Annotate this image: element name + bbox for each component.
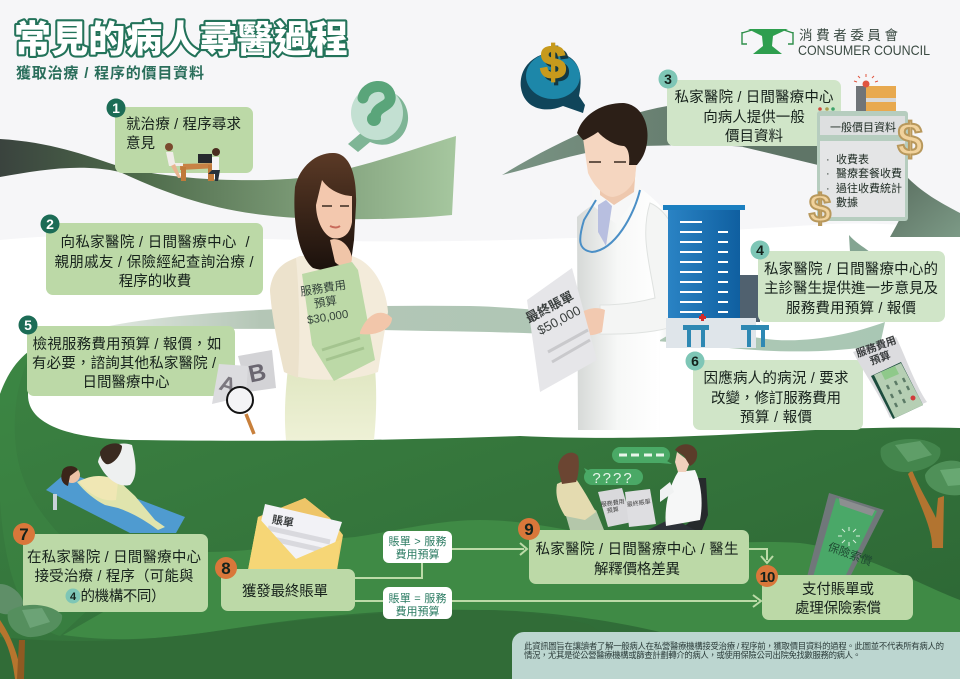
step 2 box: 向私家醫院 / 日間醫療中心 / [60,234,250,251]
paper: final bill [625,489,656,527]
step 4 box [750,240,945,322]
icon: dollar signs: $ [897,113,923,165]
condition tag: bill equals budget: 賬單 = 服務 [388,591,446,605]
patient figure [556,453,604,530]
final bill text [523,288,584,340]
speech bubble: question marks: ???? [592,470,634,487]
doctor illustration [523,103,694,430]
general price information window: 過往收費統計 [836,181,902,195]
step 7 box [13,523,208,612]
step 3 box: 價目資料 [725,128,783,145]
step 6 box: 因應病人的病況 / 要求 [704,369,849,387]
number 8: 8 [221,559,231,578]
number 6: 6 [691,353,699,369]
icon: budget paper and calculator: 預算 [868,348,893,368]
icon: A B comparison and magnifier [212,350,276,434]
number 2 [40,214,60,234]
icon: consultation at desk [165,143,220,181]
step 5 box: 檢視服務費用預算 / 報價，如 [32,336,222,353]
icon: dollar signs: $ [809,187,831,231]
icon: bill in envelope: 賬單 [271,513,295,530]
hospital illustration [663,205,769,348]
step 7 box: 的機構不同） [80,588,166,605]
condition tag: bill equals budget [383,587,452,619]
number 1: 1 [112,100,120,116]
step 6 box: 改變，修訂服務費用 [711,390,841,407]
budget paper text [299,278,351,327]
icon: phone with insurance claim: 保險索償 [826,540,874,569]
number 10: 10 [760,569,775,586]
condition tag: bill greater than budget: 賬單 > 服務 [388,534,446,548]
number 5: 5 [24,317,32,333]
general price information window [809,107,923,231]
step 6 box [686,352,863,430]
step 5 box [18,316,235,396]
inline number 4 [66,588,80,604]
step 10 box: 支付賬單或 [802,581,874,598]
step 10 box: 處理保險索償 [795,600,882,617]
budget paper text: 服務費用 [299,278,347,299]
paper: budget: 服務費用 [600,497,625,509]
final bill text: 最終賬單 [523,288,576,326]
step 4 box: 私家醫院 / 日間醫療中心的 [764,261,938,278]
step 10 box [756,565,913,620]
icon: phone with insurance claim [807,493,884,577]
number 3: 3 [664,71,672,87]
disclaimer panel: 此資訊圖旨在讓讀者了解一般病人在私營醫療機構接受治療 / 程序前，獲取價目資料的過程。此圖並不代表所有病人的 [524,641,944,651]
number 1 [106,98,126,118]
condition tag: bill greater than budget [383,531,452,563]
step 4 box: 服務費用預算 / 報價 [786,300,916,317]
paper: final bill: 最終賬單 [626,497,651,509]
disclaimer panel [512,632,960,679]
subtitle: 獲取治療 / 程序的價目資料 [16,64,204,82]
icon: dollar bubble [521,36,585,113]
number 4: 4 [756,242,764,258]
general price information window: · [826,183,830,195]
icon: doctor explaining to patient [556,444,708,530]
icon: budget paper and calculator: 服務費用 [854,334,898,360]
general price information window: · [826,168,830,180]
arrows between steps 8, 9 and 10 [355,543,773,607]
general price information window: 收費表 [836,152,869,166]
icon: patient on treatment table with doctor [46,443,185,533]
budget paper text: $30,000 [306,309,349,327]
condition tag: bill equals budget: 費用預算 [396,604,440,618]
icon: budget paper and calculator [853,334,927,419]
step 7 box: 在私家醫院 / 日間醫療中心 [27,549,201,566]
icon: question bubble [348,86,408,152]
step 9 box [518,518,749,584]
logo: Consumer Council: 消費者委員會 [799,28,902,43]
title: 常見的病人尋醫過程 [14,19,348,60]
woman illustration [270,153,392,440]
paper: budget: 預算 [606,505,619,515]
step 6 box: 預算 / 報價 [740,409,812,426]
step 7 box: 接受治療 / 程序（可能與 [34,568,194,585]
speech bubble: dashes [612,447,672,464]
step 1 box: 就治療 / 程序尋求 [126,116,242,133]
number 5 [18,316,38,334]
step 3 box: 向病人提供一般 [703,109,805,126]
number 9 [518,518,540,540]
number 7 [13,523,35,545]
logo: Consumer Council: CONSUMER COUNCIL [798,42,930,58]
step 2 box: 親朋戚友 / 保險經紀查詢治療 / [54,254,254,271]
icon: A B comparison and magnifier: A [216,370,239,399]
icon: dollar bubble: $ [543,39,569,91]
title: 常見的病人尋醫過程 [14,19,348,60]
step 4 box: 主診醫生提供進一步意見及 [764,279,938,297]
step 1 box: 意見 [126,134,155,152]
number 6 [686,352,704,370]
step 8 box [215,557,355,611]
icon: dollar signs [809,113,923,231]
icon: A B comparison and magnifier: B [246,358,269,388]
speech bubble: question marks [584,468,643,487]
general price information window: · [826,154,830,166]
number 4 [750,240,770,260]
doctor figure [648,444,708,530]
budget paper text: 預算 [313,293,338,311]
number 2: 2 [46,216,54,232]
tree: bottom left [0,584,62,679]
number 3 [658,70,678,88]
icon: dollar bubble: $ [540,36,566,88]
number 7: 7 [19,525,29,544]
step 5 box: 有必要，諮詢其他私家醫院 / [32,355,217,372]
final bill text: $50,000 [535,303,583,338]
step 2 box [40,214,263,295]
step 3 box: 私家醫院 / 日間醫療中心 [674,89,834,106]
tree: right [881,439,960,548]
condition tag: bill greater than budget: 費用預算 [396,547,440,561]
step 2 box: 程序的收費 [119,273,191,290]
step 9 box: 私家醫院 / 日間醫療中心 / 醫生 [536,541,738,558]
disclaimer panel: 情況，尤其是從公營醫療機構或篩查計劃轉介的病人，或使用保險公司出院免找數服務的病人。 [524,650,861,660]
step 1 box [106,98,253,173]
inline number 4: 4 [70,591,77,603]
icon: hospital building with alarm [854,74,896,114]
step 3 box [658,70,841,146]
paper: budget [598,488,632,527]
general price information window: 一般價目資料 [830,120,896,134]
logo: Consumer Council [742,28,930,58]
number 9: 9 [524,520,534,539]
general price information window: 數據 [836,195,858,209]
icon: bill in envelope [248,498,343,570]
step 8 box: 獲發最終賬單 [242,583,328,600]
general price information window: 醫療套餐收費 [836,166,902,180]
number 10 [756,565,778,587]
step 9 box: 解釋價格差異 [594,561,680,578]
step 5 box: 日間醫療中心 [82,374,170,391]
